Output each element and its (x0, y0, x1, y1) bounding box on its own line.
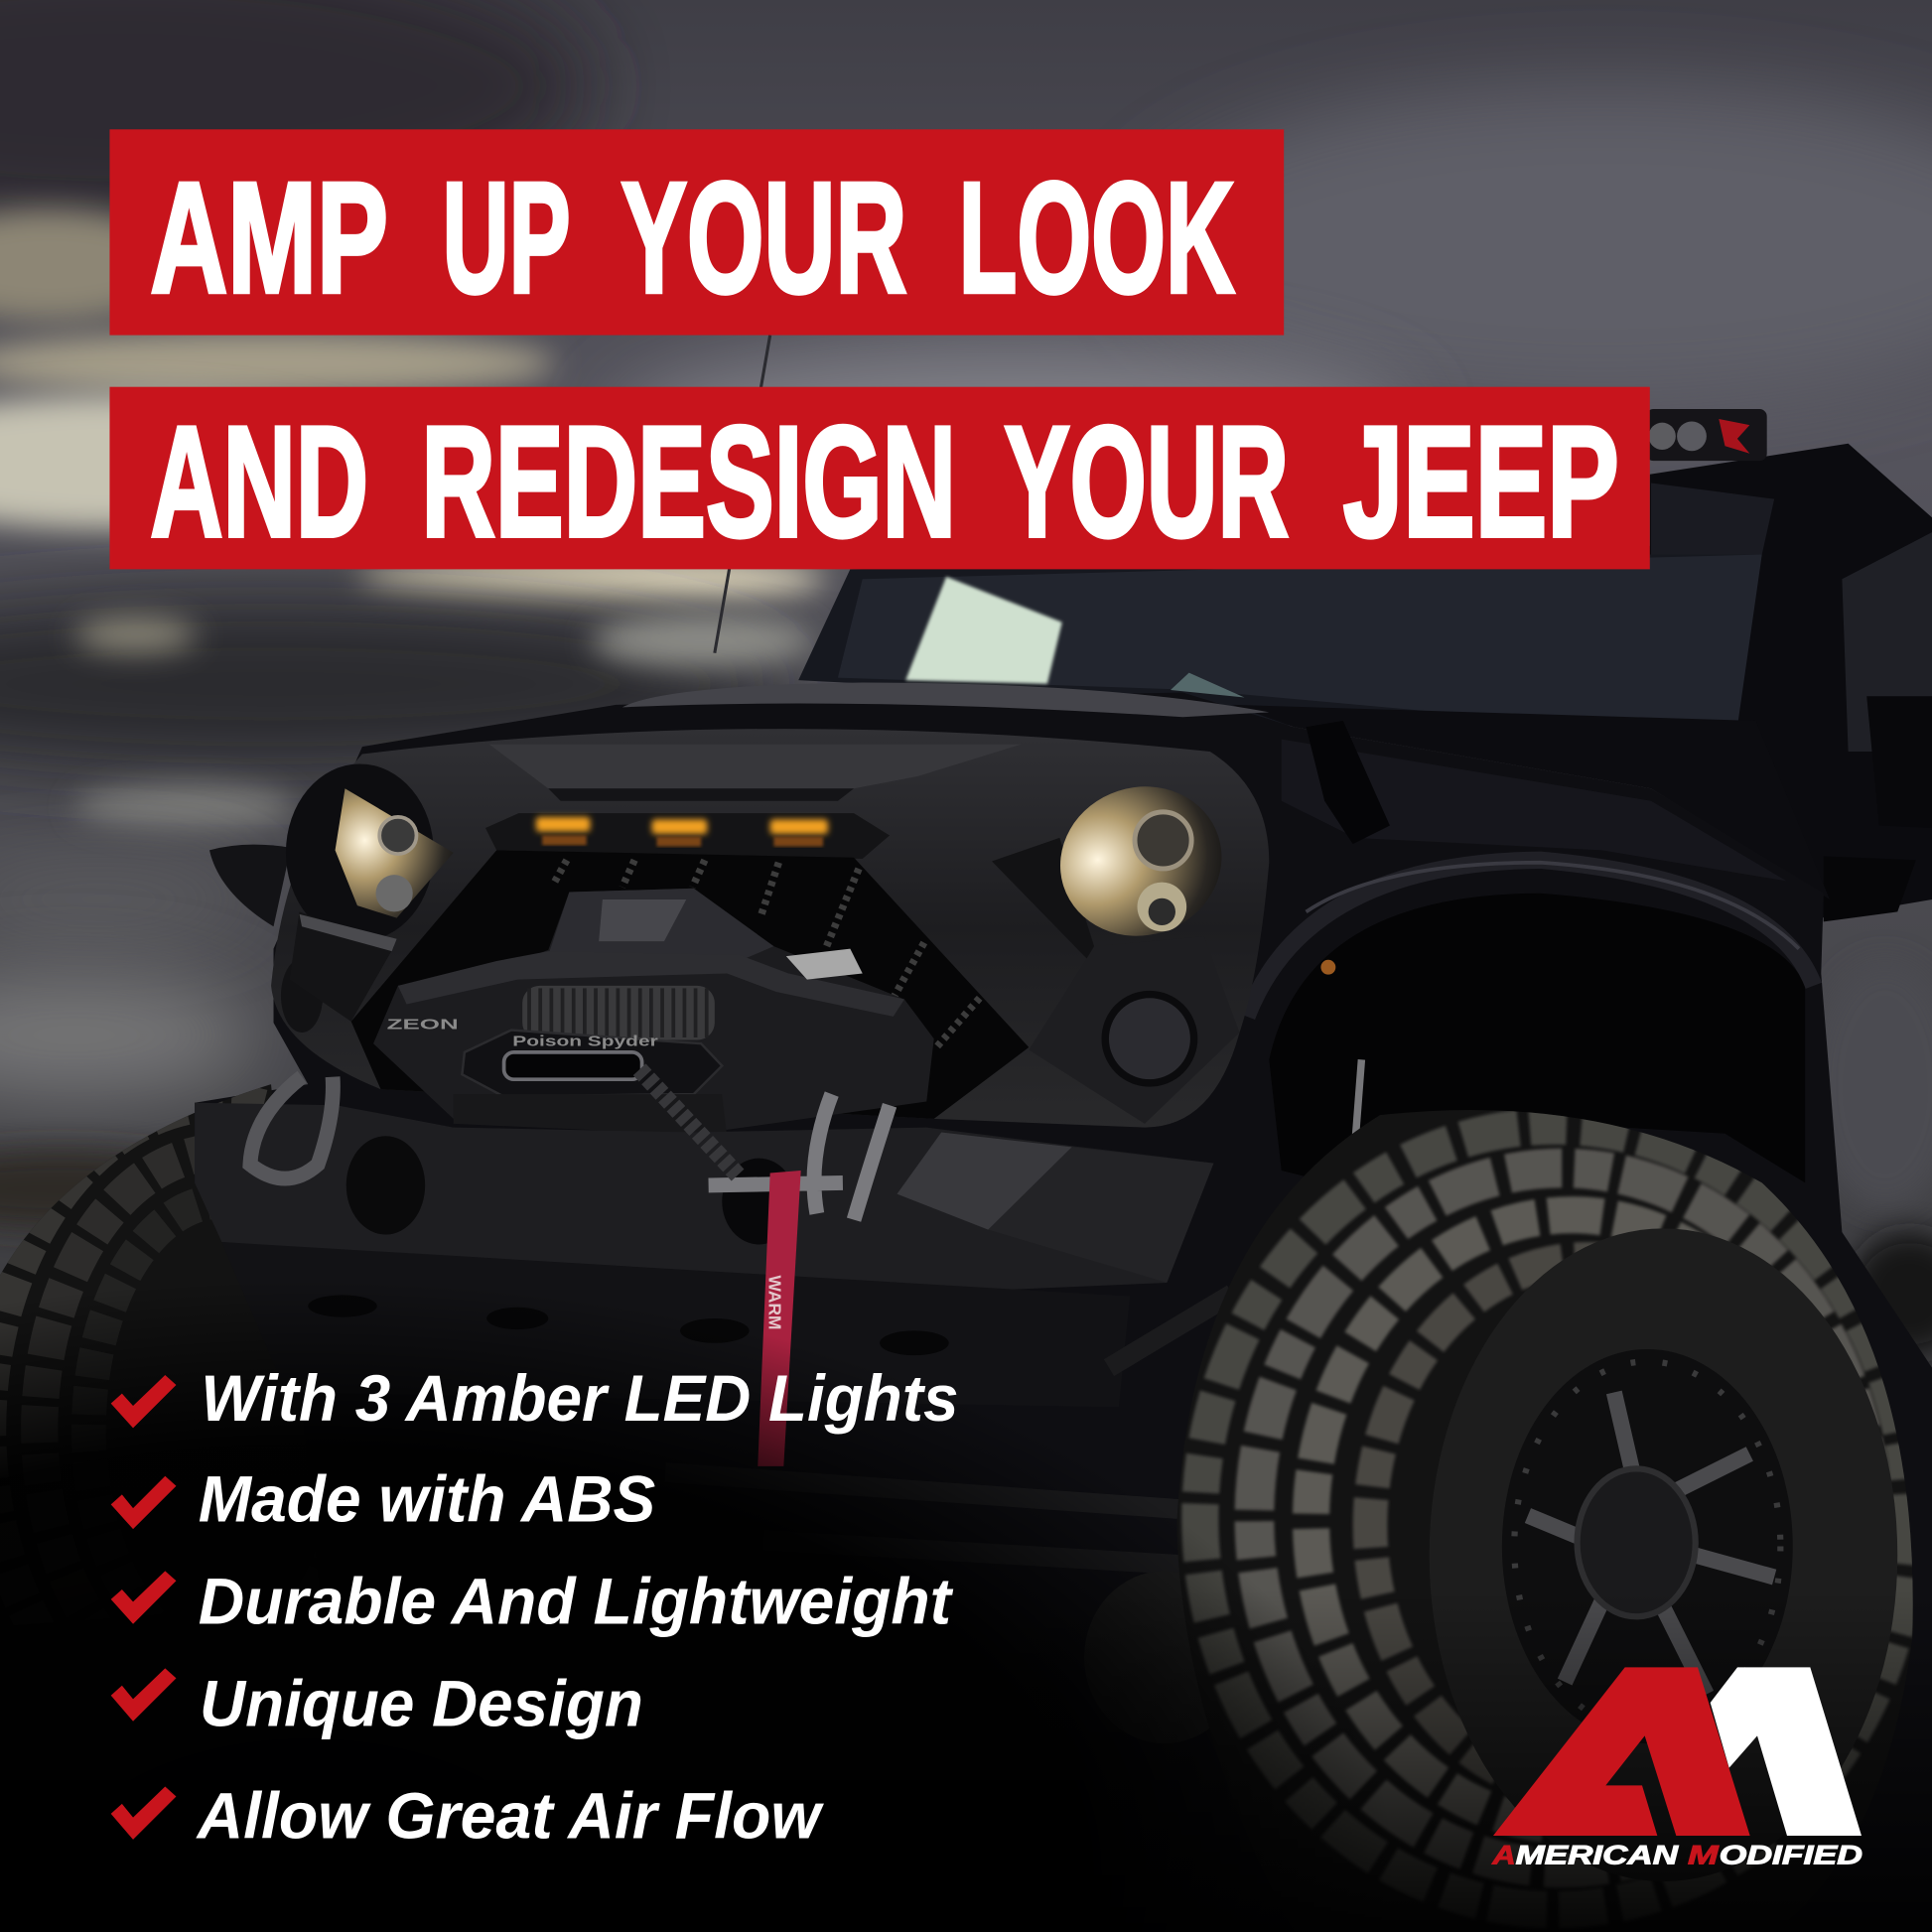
item: unique design: Unique Design (200, 1667, 643, 1740)
red tow strap (758, 1171, 801, 1466)
grille (271, 729, 1269, 1128)
item: durable: Durable And Lightweight (199, 1565, 954, 1638)
banner: amp up your look: YOUR (621, 149, 906, 326)
jeep body silhouette (0, 692, 1932, 1932)
banner: and redesign your jeep: JEEP (1343, 393, 1619, 570)
logo wordmark: MERICAN (1516, 1841, 1679, 1870)
banner: and redesign your jeep: REDESIGN (421, 393, 956, 570)
body sheen on hood side (1282, 740, 1787, 881)
left eye surround (286, 763, 434, 941)
hood latch (1307, 721, 1390, 844)
left fog light (281, 959, 323, 1033)
item: ABS: Made with ABS (199, 1462, 655, 1536)
suspension (665, 1294, 1232, 1565)
winch base block (454, 1094, 727, 1136)
cowl and wipers (1232, 705, 1830, 899)
logo mark: red A (1493, 1667, 1750, 1836)
banner: and redesign your jeep: YOUR (1004, 393, 1289, 570)
logo wordmark (1491, 1841, 1863, 1870)
antenna (715, 336, 770, 653)
winch remote plug (786, 949, 863, 980)
banner: amp up your look (109, 129, 1284, 336)
logo wordmark: A (1491, 1841, 1516, 1870)
front tire (1159, 1084, 1932, 1932)
grille opening (351, 850, 1029, 1119)
amber LED lights (536, 817, 828, 847)
fender and wheel well (1247, 860, 1814, 1182)
right headlight (1040, 765, 1241, 957)
item: amber LED lights: With 3 Amber LED Lights (201, 1361, 959, 1435)
tire sidewall (1430, 1228, 1897, 1881)
logo mark: white 1 (1711, 1667, 1862, 1836)
left tire (0, 1084, 272, 1449)
banner: amp up your look: AMP (150, 149, 388, 326)
banner: amp up your look: LOOK (959, 149, 1235, 326)
roof light bar (1646, 409, 1767, 461)
winch brand: ZEON (387, 1017, 459, 1033)
winch rope drum (522, 986, 715, 1039)
logo: American Modified (1491, 1667, 1863, 1870)
eye facet and right panel (992, 838, 1094, 959)
left text shadow (0, 1171, 1392, 1932)
banner: and redesign your jeep: AND (150, 393, 368, 570)
hood (622, 683, 1269, 717)
red tow strap: WARM (764, 1276, 784, 1329)
headline banners (109, 129, 1650, 570)
banner: amp up your look: UP (443, 149, 571, 326)
logo wordmark: ODIFIED (1720, 1841, 1863, 1870)
windshield (798, 542, 1780, 740)
wheel (1502, 1349, 1793, 1743)
bottom shadow (0, 1589, 1932, 1932)
opening mesh (554, 860, 980, 1047)
left lower panel facet (290, 911, 394, 1022)
item: air flow: Allow Great Air Flow (196, 1779, 824, 1853)
left D-ring shackle (250, 1077, 333, 1178)
winch (373, 889, 934, 1136)
winch fairlead (462, 1031, 722, 1097)
right D-ring shackle (709, 1094, 890, 1220)
grille top panel (489, 745, 1022, 788)
tire tread lugs (1200, 1126, 1910, 1910)
feature checklist (111, 1361, 959, 1853)
amber light ledge (485, 813, 890, 859)
banner: and redesign your jeep (109, 387, 1650, 570)
front fender wing left (209, 845, 291, 926)
cab, windshield frame and side window (1650, 444, 1932, 921)
right fog light (1105, 995, 1194, 1083)
winch rope (639, 1069, 740, 1176)
skid plate (221, 1242, 1130, 1407)
bumper (195, 1069, 1213, 1294)
rear tire (1084, 1571, 1244, 1743)
winch fairlead: Poison Spyder (512, 1035, 658, 1050)
left headlight (336, 788, 454, 918)
logo wordmark: M (1688, 1841, 1720, 1870)
